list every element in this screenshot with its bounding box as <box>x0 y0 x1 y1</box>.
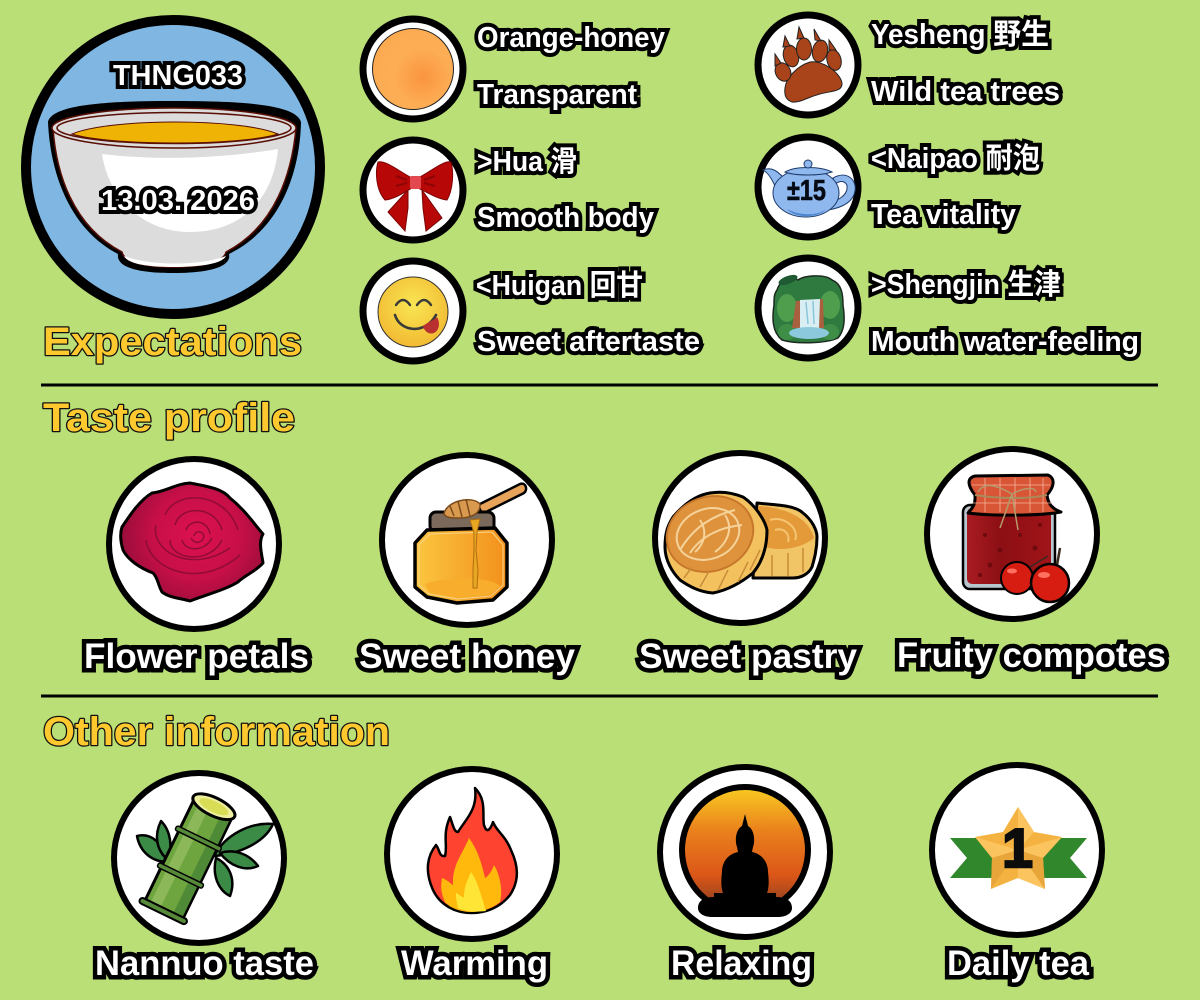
panel: taste profile <box>43 396 1166 676</box>
label: sweet aftertaste: Sweet aftertaste <box>477 326 700 358</box>
icon: tea bowl badge <box>26 20 320 314</box>
icon: red bow <box>363 140 463 240</box>
icon: teapot <box>758 137 858 237</box>
item: huigan <box>363 261 700 361</box>
label: wild tea trees: Wild tea trees <box>871 76 1060 108</box>
heading: other information: Other information <box>43 710 390 754</box>
icon: star with ribbon and number one: 1 <box>1002 817 1033 879</box>
panel: expectations <box>26 15 1139 364</box>
icon: star with ribbon and number one <box>932 765 1102 935</box>
icon: smiley <box>363 261 463 361</box>
panel: other information <box>43 710 1102 983</box>
label: daily tea: Daily tea <box>947 944 1090 983</box>
label: clarity: Transparent <box>477 79 637 111</box>
item: sweet pastry <box>639 453 858 676</box>
icon: meditating buddha <box>660 767 830 937</box>
heading: expectations: Expectations <box>43 320 302 364</box>
label: sweet pastry: Sweet pastry <box>639 637 858 676</box>
label: flower petals: Flower petals <box>84 637 309 676</box>
item: yesheng <box>758 15 1060 115</box>
label: shengjin: >Shengjin 生津 <box>871 268 1061 301</box>
label: tea vitality: Tea vitality <box>871 199 1016 231</box>
label: mouth water-feeling: Mouth water-feeling <box>871 326 1139 358</box>
label: fruity compotes: Fruity compotes <box>897 636 1166 675</box>
item: sweet honey <box>359 455 576 676</box>
heading: taste profile: Taste profile <box>43 396 295 440</box>
label: huigan: <Huigan 回甘 <box>476 269 643 302</box>
icon: teapot: ±15 <box>787 175 826 207</box>
label: yesheng: Yesheng 野生 <box>871 18 1049 51</box>
label: smooth body: Smooth body <box>477 202 654 234</box>
item: relaxing <box>660 767 830 983</box>
icon: flame <box>387 769 557 939</box>
icon: bear paw <box>758 15 858 115</box>
icon: bamboo <box>114 773 284 943</box>
item: naipao <box>758 137 1040 237</box>
item: flower petals <box>84 459 309 676</box>
label: hua: >Hua 滑 <box>477 145 577 178</box>
item: colour <box>363 19 665 119</box>
icon: rose <box>109 459 279 629</box>
label: naipao: <Naipao 耐泡 <box>871 142 1040 175</box>
icon: waterfall <box>758 258 858 358</box>
item: nannuo taste <box>95 773 314 983</box>
icon: orange-honey liquor <box>363 19 463 119</box>
item: daily tea <box>932 765 1102 983</box>
item: hua <box>363 140 654 240</box>
label: warming: Warming <box>401 944 548 983</box>
icon: honey jar <box>382 455 552 625</box>
badge code: THNG033 <box>113 60 243 92</box>
item: warming <box>387 769 557 983</box>
icon: mooncakes <box>655 453 825 623</box>
badge date: 13.03. 2026 <box>101 185 255 217</box>
item: shengjin <box>758 258 1139 358</box>
item: fruity compotes <box>897 449 1166 675</box>
label: relaxing: Relaxing <box>671 944 812 983</box>
label: colour: Orange-honey <box>477 22 665 54</box>
icon: jam jar and cherries <box>927 449 1097 619</box>
label: sweet honey: Sweet honey <box>359 637 576 676</box>
label: nannuo taste: Nannuo taste <box>95 944 314 983</box>
